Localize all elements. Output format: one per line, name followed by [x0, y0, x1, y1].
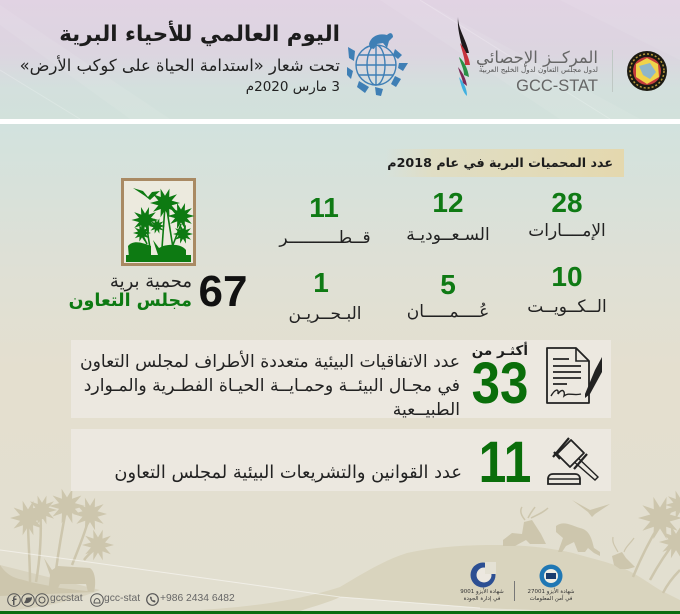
- left deer: [44, 558, 95, 592]
- title: اليوم العالمي للأحياء البرية: [59, 22, 340, 47]
- panel: legislation: [71, 429, 611, 491]
- agreements number: 33: [472, 351, 528, 416]
- right palms: [633, 527, 680, 593]
- stat: Kuwait: 10: [551, 261, 583, 292]
- logo tagline: لدول مجلس التعاون لدول الخليج العربية: [479, 65, 598, 74]
- panel: reserves heading: [403, 149, 624, 177]
- certificate: ISO 27001: في أمن المعلومات: [530, 596, 572, 602]
- left palms: [28, 505, 98, 582]
- icon: GCC emblem: [612, 50, 667, 92]
- stat: Saudi Arabia: السـعــوديـة: [406, 225, 490, 245]
- legislation number: 11: [479, 430, 531, 495]
- stat: Saudi Arabia: [406, 187, 490, 245]
- agreements description: [80, 350, 460, 420]
- stat: Qatar: قــطــــــــــر: [279, 228, 371, 248]
- stat: Bahrain: [289, 267, 361, 324]
- stat: Saudi Arabia: 12: [432, 187, 464, 218]
- agreements description: في مجـال البيئــة وحمـايــة الحيـاة الفطـرية والمـوارد: [84, 376, 460, 396]
- stat: UAE: [528, 187, 606, 241]
- certificate: ISO 27001: شهادة الأيزو 27001: [527, 589, 575, 595]
- icon: whatsapp: [146, 593, 159, 606]
- hill: [180, 545, 680, 611]
- stat: Qatar: [278, 192, 371, 248]
- icon: nature reserve emblem: [121, 178, 196, 266]
- logo name Arabic: المركــز الإحصائي: [476, 48, 598, 67]
- phone number: +986 2434 6482: [160, 593, 235, 604]
- stat: UAE: 28: [551, 187, 583, 218]
- certificate: ISO 9001: في إدارة الجودة: [464, 596, 500, 602]
- agreements description: الطبيــعية: [393, 400, 460, 420]
- date: 3 مارس 2020م: [246, 79, 340, 95]
- stat: Kuwait: [527, 261, 607, 317]
- certificate: ISO 9001: شهادة الأيزو 9001: [460, 589, 504, 595]
- stat: Bahrain: 1: [313, 267, 329, 298]
- total label: محمية برية: [110, 271, 192, 292]
- more-than label: أكثـر من: [472, 343, 528, 359]
- agreements description: عدد الاتفاقيات البيئية متعددة الأطراف لمجلس التعاون: [80, 352, 460, 372]
- stat: Bahrain: البـحــريـن: [289, 304, 361, 324]
- tiger: [556, 523, 600, 556]
- certificate divider: [514, 581, 515, 601]
- total count: 67: [199, 267, 247, 316]
- small deer: [612, 552, 635, 569]
- icon: gavel: [547, 437, 599, 485]
- total label GCC: مجلس التعاون: [69, 291, 192, 311]
- logo name Latin: GCC-STAT: [516, 77, 598, 95]
- bird: [572, 500, 610, 517]
- stat: Qatar: 11: [309, 192, 339, 223]
- legislation description: عدد القوانين والتشريعات البيئية لمجلس التعاون: [114, 462, 462, 483]
- icons: social media: [7, 593, 104, 607]
- icon: wildlife globe: [347, 33, 408, 96]
- social handle gccstat: gccstat: [50, 593, 83, 604]
- stat: UAE: الإمــــارات: [528, 221, 606, 241]
- certificate: ISO 9001: [460, 562, 504, 602]
- certificate: ISO 27001: [527, 564, 575, 602]
- subtitle: تحت شعار «استدامة الحياة على كوكب الأرض»: [20, 56, 340, 75]
- icon: signed document: [546, 347, 602, 404]
- heading text: عدد المحميات البرية في عام 2018م: [387, 155, 613, 170]
- stat: Kuwait: الــكــويــت: [527, 297, 607, 317]
- stat: Oman: عُــــمـــــان: [407, 302, 489, 322]
- moose: [503, 520, 546, 546]
- icon: GCC-STAT ribbon logo: [458, 18, 470, 96]
- social handle gcc-stat: gcc-stat: [104, 593, 140, 604]
- panel: agreements: [71, 340, 611, 418]
- stat: Oman: [407, 269, 489, 322]
- stat: Oman: 5: [440, 269, 456, 300]
